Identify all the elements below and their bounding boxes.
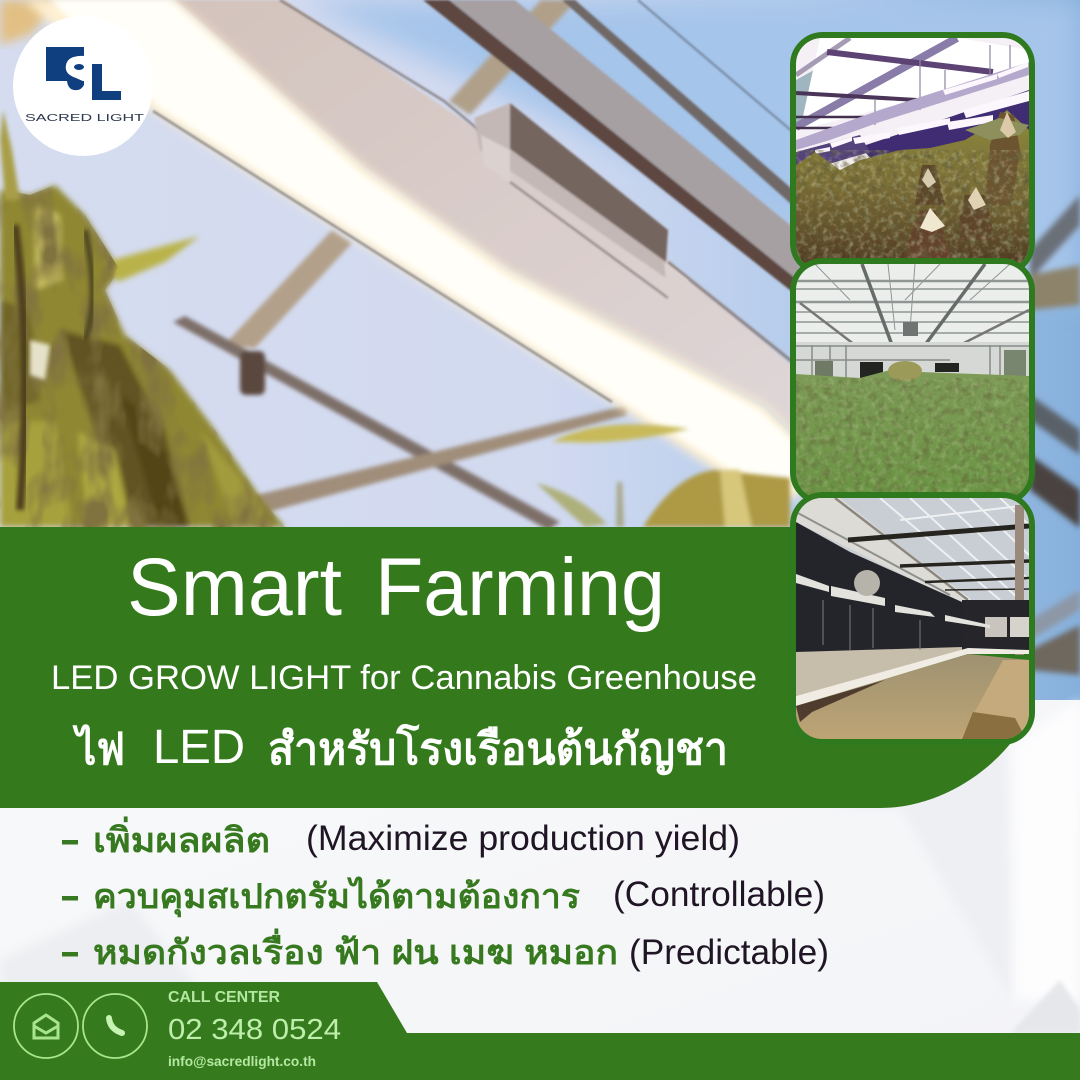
subtitle thai (72, 721, 728, 775)
subtitle english: LED GROW LIGHT for Cannabis Greenhouse (51, 659, 757, 697)
benefit 2: ควบคุมสเปกตรัมได้ตามต้องการ (93, 876, 581, 918)
subtitle thai: LED (153, 721, 245, 774)
benefit 3 (62, 928, 829, 972)
logo mark (46, 47, 121, 100)
right beams beyond frames (1030, 195, 1080, 675)
subtitle thai: ไฟ (72, 723, 125, 774)
phone number: 02 348 0524 (168, 1014, 341, 1046)
photo frame: empty greenhouse with LED fixtures (793, 495, 1032, 742)
green title panel (0, 527, 1014, 808)
benefit 1: (Maximize production yield) (306, 818, 740, 858)
benefit 2: (Controllable) (613, 874, 825, 914)
title: Smart (127, 542, 342, 633)
title (127, 542, 665, 633)
call center label: CALL CENTER (168, 989, 280, 1006)
foliage left (0, 110, 285, 527)
benefit 1 (62, 816, 740, 860)
footer contact band (0, 982, 1080, 1080)
foliage right (536, 424, 790, 527)
logo name: SACRED LIGHT (25, 112, 145, 124)
photo frame: purple-lit cannabis greenhouse (793, 35, 1032, 273)
benefit 2 (62, 874, 825, 918)
support struts (173, 0, 627, 530)
benefit 3: (Predictable) (629, 932, 829, 972)
LED glowing tube (25, 0, 800, 500)
email address: info@sacredlight.co.th (168, 1053, 316, 1069)
subtitle thai: สำหรับโรงเรือนต้นกัญชา (268, 722, 728, 775)
title: Farming (375, 542, 665, 633)
icon: email (14, 994, 78, 1058)
icon: phone (83, 994, 147, 1058)
LED housing bracket (474, 103, 690, 312)
benefit 3: หมดกังวลเรื่อง ฟ้า ฝน เมฆ หมอก (93, 928, 618, 972)
photo frame: green canopy greenhouse (793, 261, 1032, 502)
lower white background (0, 700, 1080, 1080)
benefit 1: เพิ่มผลผลิต (93, 816, 270, 860)
logo badge (13, 16, 153, 156)
background photo: greenhouse roof with LED light (0, 0, 1080, 700)
LED housing (175, 0, 800, 440)
upper beams (423, 0, 800, 298)
